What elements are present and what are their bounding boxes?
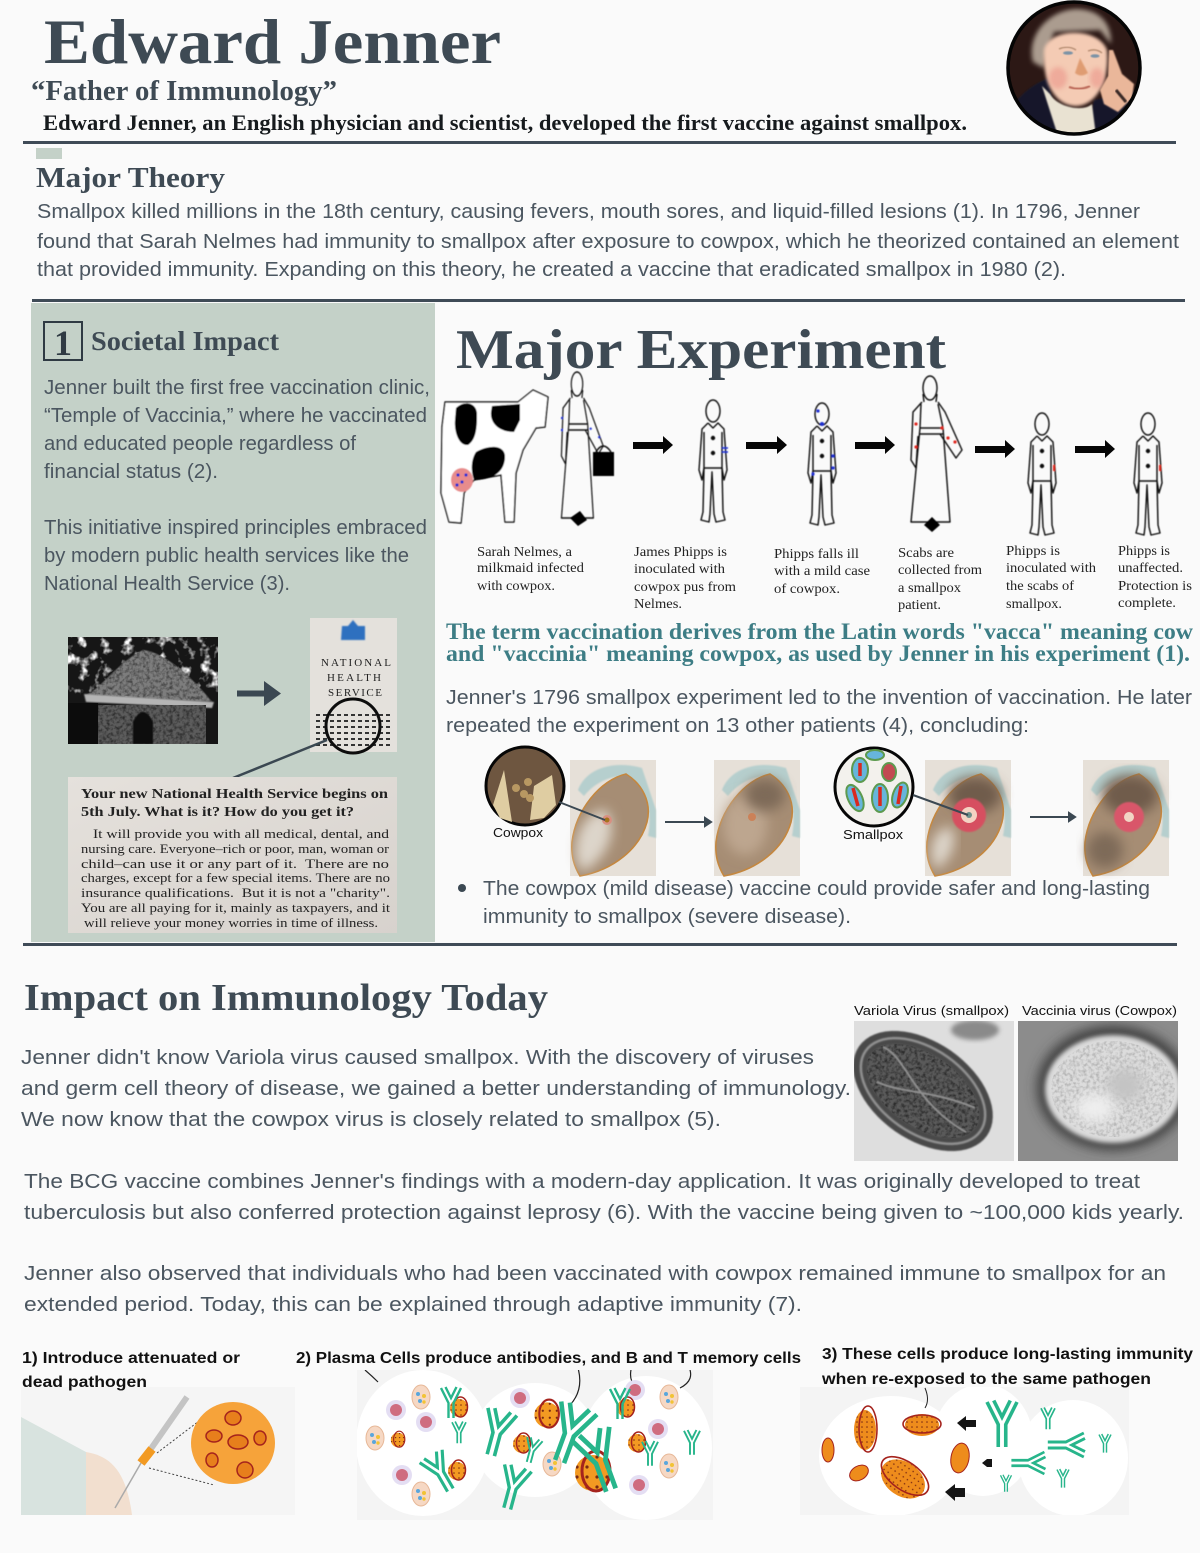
- icon: James Phipps inoculated: [699, 400, 728, 522]
- portrait of Edward Jenner: [1005, 0, 1145, 136]
- callout: term vaccination: and "vaccinia" meaning cowpox, as used by Jenner in his experiment (1).: [446, 641, 1190, 666]
- step 3: [822, 1348, 1193, 1501]
- step 3 label: when re-exposed to the same pathogen: [821, 1371, 1151, 1388]
- text: conclusion bullet: The cowpox (mild disease) vaccine could provide safer and long-lasting: [483, 878, 1150, 900]
- heading: Major Theory: Major Theory: [36, 162, 226, 194]
- caption: Phipps inoculated: the scabs of: [1006, 579, 1074, 594]
- text: BCG paragraph: [24, 1171, 1184, 1224]
- arrow 1: [633, 436, 673, 454]
- caption: scabs collected: [898, 546, 982, 613]
- step 1 label: [22, 1350, 240, 1391]
- arrow: cowpox: [665, 818, 711, 826]
- text: NHS paragraph: National Health Service (3).: [44, 573, 290, 595]
- caption: Phipps unaffected: complete.: [1118, 596, 1176, 611]
- image: smallpox lesion after: [1083, 760, 1169, 876]
- callout: term vaccination: [446, 619, 1193, 666]
- text: clinic paragraph: financial status (2).: [44, 461, 218, 483]
- NHS leaflet excerpt: Your new National Health Service begins on: [81, 787, 388, 802]
- heading: Impact on Immunology Today: Impact on Immunology Today: [24, 977, 548, 1019]
- text: NHS paragraph: by modern public health services like the: [44, 545, 409, 567]
- title: Edward Jenner: [44, 6, 501, 77]
- illustration: re-exposure: [822, 1388, 1112, 1501]
- connector line to leaflet: [233, 740, 327, 778]
- icon: Phipps ill: [808, 403, 836, 525]
- caption: Phipps inoculated: [1006, 544, 1096, 612]
- caption: scabs collected: a smallpox: [898, 581, 961, 596]
- caption: scabs collected: patient.: [898, 598, 941, 613]
- text: adaptive immunity paragraph: extended period. Today, this can be explained through adaptive immunity (7).: [24, 1294, 802, 1316]
- text: Variola paragraph: [21, 1047, 851, 1131]
- connector: cowpox to arm: [559, 802, 605, 820]
- NHS leaflet excerpt: child–can use it or any part of it. There are no: [81, 857, 389, 871]
- step 2: [296, 1350, 801, 1520]
- NHS leaflet excerpt: You are all paying for it, mainly as taxpayers, and it: [81, 901, 391, 915]
- step 3 label: 3) These cells produce long-lasting immunity: [822, 1346, 1193, 1363]
- NHS leaflet excerpt: nursing care. Everyone–rich or poor, man, woman or: [81, 842, 390, 856]
- label: Variola: Variola Virus (smallpox): [854, 1003, 1009, 1018]
- text: BCG paragraph: tuberculosis but also conferred protection against leprosy (6). With the vaccine being given to ~100,000 kids yearly.: [24, 1202, 1184, 1224]
- heading: Major Experiment: Major Experiment: [456, 319, 946, 381]
- image: cowpox lesion before: [570, 760, 656, 876]
- caption: Phipps falls ill: with a mild case: [774, 564, 870, 579]
- text: theory paragraph: Smallpox killed millions in the 18th century, causing fevers, mouth sores, and liquid-filled lesions (1). In 1796, Jenner: [37, 201, 1140, 223]
- arrow 3: [855, 436, 895, 454]
- illustration: syringe injection: [21, 1387, 295, 1515]
- step 1 label: dead pathogen: [22, 1374, 147, 1391]
- callout: term vaccination: The term vaccination derives from the Latin words "vacca" meaning cow: [446, 619, 1193, 644]
- viruses: [391, 1397, 646, 1491]
- image: Vaccinia micrograph: [1018, 1021, 1189, 1161]
- text: theory paragraph: found that Sarah Nelmes had immunity to smallpox after exposure to cowpox, which he theorized contained an element: [37, 231, 1179, 253]
- text: Variola paragraph: and germ cell theory of disease, we gained a better understanding of immunology.: [21, 1078, 851, 1100]
- icon: smallpox virus: [835, 748, 913, 826]
- text: Variola paragraph: Jenner didn't know Variola virus caused smallpox. With the discovery of viruses: [21, 1047, 814, 1069]
- text: adaptive immunity paragraph: Jenner also observed that individuals who had been vaccinated with cowpox remained immune to smallpox for an: [24, 1263, 1166, 1285]
- caption: Phipps unaffected: unaffected.: [1118, 561, 1183, 576]
- image: cowpox lesion after: [714, 760, 800, 876]
- virus micrographs: [854, 1006, 1178, 1161]
- step 3 label: [821, 1346, 1193, 1388]
- arrow 4: [975, 440, 1015, 458]
- intro line: Edward Jenner, an English physician and scientist, developed the first vaccine against smallpox.: [43, 110, 967, 135]
- top divider: [23, 141, 1176, 144]
- label: Vaccinia: Vaccinia virus (Cowpox): [1022, 1003, 1177, 1018]
- image: Variola micrograph: [854, 1021, 1014, 1161]
- mid divider: [23, 943, 1177, 946]
- panel: societal impact: [31, 303, 435, 942]
- text: adaptive immunity paragraph: [24, 1263, 1166, 1316]
- NHS poster: SERVICE: [328, 687, 382, 699]
- text: NHS paragraph: This initiative inspired principles embraced: [44, 517, 427, 539]
- text: experiment paragraph: Jenner's 1796 smallpox experiment led to the invention of vaccination. He later: [446, 687, 1192, 709]
- NHS poster: NATIONAL: [321, 657, 391, 669]
- caption: Phipps inoculated: Phipps is: [1006, 544, 1060, 559]
- text: clinic paragraph: [44, 377, 430, 483]
- text: theory paragraph: [37, 201, 1179, 281]
- caption: James Phipps: Nelmes.: [634, 597, 682, 612]
- number box: [44, 322, 82, 363]
- label: Smallpox: Smallpox: [843, 827, 904, 842]
- plasma cells: [386, 1380, 668, 1495]
- label: Cowpox: Cowpox: [493, 825, 544, 840]
- arm illustrations: [486, 747, 1169, 876]
- step 1 label: 1) Introduce attenuated or: [22, 1350, 240, 1367]
- arrow: smallpox: [1030, 813, 1075, 821]
- caption: James Phipps: James Phipps is: [634, 545, 727, 560]
- arrow: clinic to NHS: [237, 681, 281, 706]
- NHS poster: [310, 618, 397, 753]
- image: smallpox lesion before: [925, 760, 1011, 876]
- caption: James Phipps: cowpox pus from: [634, 580, 736, 595]
- caption: scabs collected: Scabs are: [898, 546, 954, 561]
- section divider: [32, 299, 1185, 302]
- caption: scabs collected: collected from: [898, 563, 982, 578]
- caption: Sarah Nelmes: Sarah Nelmes, a: [477, 545, 573, 560]
- caption: Phipps unaffected: Phipps is: [1118, 544, 1170, 559]
- antibodies: [987, 1400, 1111, 1492]
- text: clinic paragraph: Jenner built the first free vaccination clinic,: [44, 377, 430, 399]
- caption: Sarah Nelmes: [477, 545, 584, 594]
- heading accent: [36, 148, 62, 159]
- text: Variola paragraph: We now know that the cowpox virus is closely related to smallpox (5).: [21, 1109, 721, 1131]
- NHS leaflet excerpt: charges, except for a few special items. There are no: [81, 871, 390, 885]
- caption: Phipps unaffected: [1118, 544, 1192, 611]
- caption: James Phipps: inoculated with: [634, 562, 725, 577]
- experiment diagram: [441, 372, 1192, 613]
- text: clinic paragraph: and educated people regardless of: [44, 433, 356, 455]
- text: clinic paragraph: “Temple of Vaccinia,” where he vaccinated: [44, 405, 427, 427]
- viruses: [822, 1406, 971, 1507]
- NHS poster: HEALTH: [327, 672, 381, 684]
- caption: James Phipps: [634, 545, 736, 612]
- antibodies: [419, 1387, 700, 1512]
- NHS leaflet excerpt: will relieve your money worries in time of illness.: [84, 916, 378, 930]
- icon: Phipps inoculated with scabs: [1028, 413, 1056, 535]
- number box: 1: [54, 323, 72, 363]
- subtitle: “Father of Immunology”: [31, 75, 337, 107]
- arrows to viruses: [945, 1416, 992, 1501]
- NHS leaflet excerpt: insurance qualifications. But it is not a "charity".: [81, 886, 390, 900]
- caption: Phipps falls ill: Phipps falls ill: [774, 547, 859, 562]
- text: NHS paragraph: [44, 517, 427, 595]
- illustration: plasma and memory cells: [364, 1370, 701, 1510]
- icon: Phipps unaffected: [1134, 413, 1162, 535]
- text: BCG paragraph: The BCG vaccine combines Jenner's findings with a modern-day application. It was originally developed to treat: [24, 1171, 1140, 1193]
- connector: smallpox to arm: [913, 795, 968, 815]
- heading: Societal Impact: Societal Impact: [91, 326, 279, 356]
- NHS leaflet excerpt: [68, 777, 397, 933]
- memory cells: [366, 1385, 678, 1506]
- NHS leaflet excerpt: It will provide you with all medical, dental, and: [93, 827, 390, 841]
- text: experiment paragraph: [446, 687, 1192, 737]
- caption: Phipps inoculated: inoculated with: [1006, 561, 1096, 576]
- arrow 5: [1075, 440, 1115, 458]
- icon: cow and milkmaid: [441, 372, 614, 526]
- step 2 label: 2) Plasma Cells produce antibodies, and B and T memory cells: [296, 1350, 801, 1367]
- step 1: [21, 1350, 295, 1515]
- caption: Phipps inoculated: smallpox.: [1006, 597, 1062, 612]
- caption: Sarah Nelmes: milkmaid infected: [477, 561, 584, 576]
- text: experiment paragraph: repeated the experiment on 13 other patients (4), concluding:: [446, 715, 1029, 737]
- caption: Phipps falls ill: of cowpox.: [774, 582, 840, 597]
- caption: Sarah Nelmes: with cowpox.: [477, 579, 555, 594]
- icon: smallpox patient: [911, 376, 962, 532]
- icon: cowpox udder: [486, 747, 564, 825]
- text: theory paragraph: that provided immunity. Expanding on this theory, he created a vaccine that eradicated smallpox in 1980 (2).: [37, 259, 1066, 281]
- caption: Phipps falls ill: [774, 547, 870, 597]
- text: conclusion bullet: immunity to smallpox (severe disease).: [483, 906, 851, 928]
- text: conclusion bullet: [458, 878, 1150, 928]
- photo: Temple of Vaccinia hut: [68, 637, 218, 744]
- arrow 2: [746, 436, 787, 454]
- caption: Phipps unaffected: Protection is: [1118, 579, 1192, 594]
- NHS leaflet excerpt: 5th July. What is it? How do you get it?: [81, 805, 354, 820]
